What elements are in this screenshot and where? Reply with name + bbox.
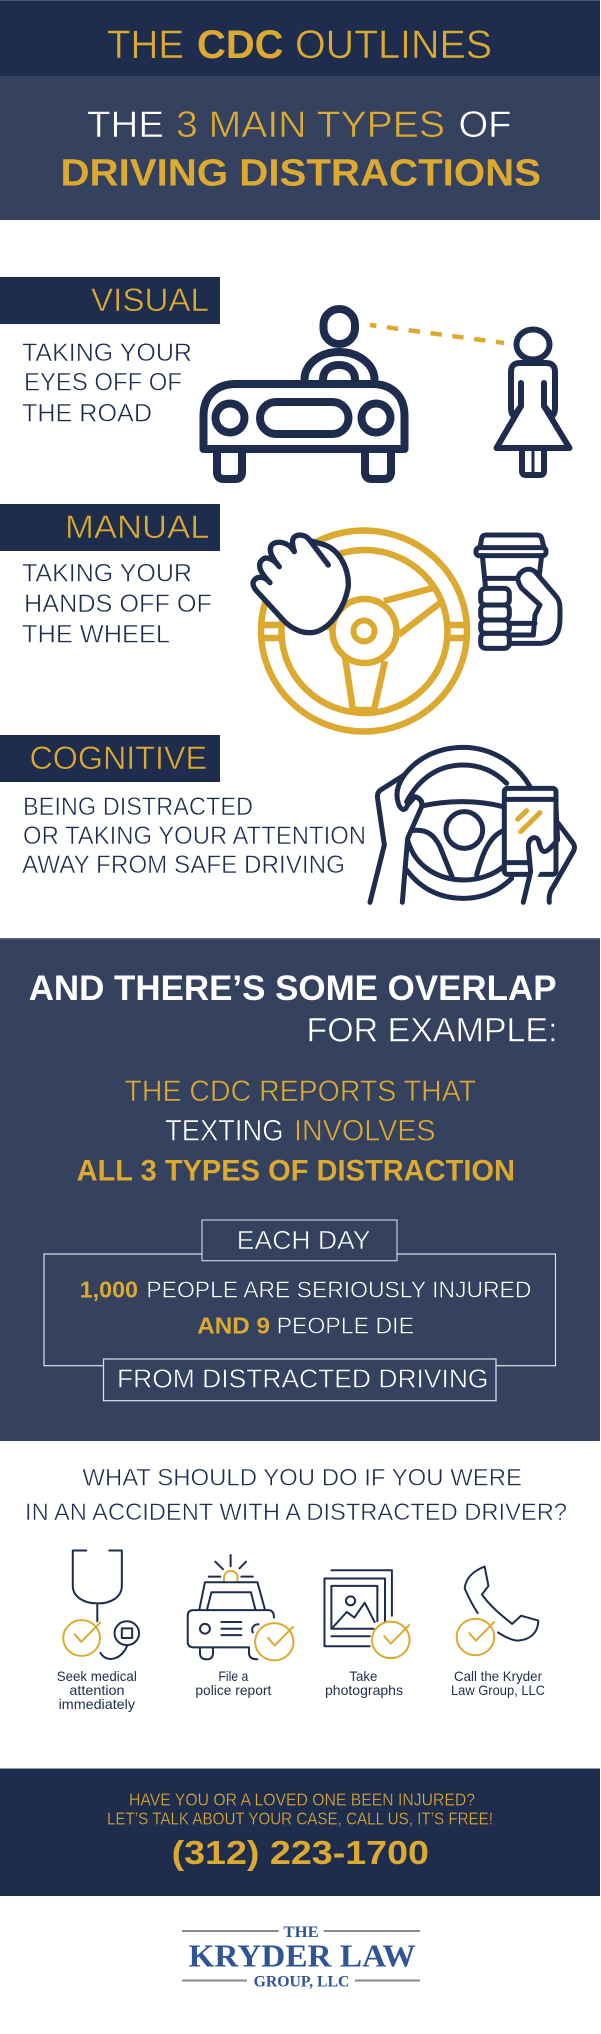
text: cognitive description: AWAY FROM SAFE DRIVING: [22, 852, 345, 879]
caption: Seek medical: [57, 1668, 137, 1684]
panel: header: [0, 0, 600, 220]
icon: driver in car: [204, 309, 404, 479]
caption: police report: [195, 1682, 271, 1698]
caption: [451, 1668, 545, 1698]
heading: the CDC outlines: THE: [107, 23, 184, 67]
stat: injuries and deaths: AND 9: [197, 1313, 270, 1339]
caption: immediately: [59, 1696, 135, 1712]
text: CDC report: [77, 1075, 515, 1188]
caption: attention: [69, 1682, 124, 1698]
heading: driving distractions: DRIVING DISTRACTIONS: [60, 153, 541, 195]
stat: injuries and deaths: PEOPLE ARE SERIOUSLY INJURED: [146, 1277, 531, 1303]
text: visual description: THE ROAD: [22, 401, 152, 428]
caption: Law Group, LLC: [451, 1682, 545, 1698]
stat: injuries and deaths: PEOPLE DIE: [277, 1313, 414, 1339]
caption: photographs: [325, 1682, 403, 1698]
logo: The Kryder Law Group: THE: [284, 1924, 319, 1941]
icon: stethoscope: [63, 1551, 139, 1659]
caption: [57, 1668, 137, 1712]
label: cognitive: [0, 735, 220, 782]
text: manual description: [22, 561, 212, 649]
logo: The Kryder Law Group: GROUP, LLC: [254, 1974, 349, 1991]
caption: Call the Kryder: [454, 1668, 542, 1684]
box: statistics: [44, 1220, 556, 1401]
icon: police car: [188, 1555, 293, 1660]
caption: [195, 1668, 271, 1698]
heading: the 3 main types of: 3 MAIN TYPES: [176, 104, 445, 145]
logo: The Kryder Law Group: KRYDER LAW: [188, 1938, 416, 1974]
callout: each day: [202, 1220, 397, 1261]
step: take photographs: [324, 1570, 410, 1698]
icon: hand holding coffee cup: [476, 535, 560, 648]
logo: The Kryder Law Group: [182, 1924, 420, 1991]
stat: injuries and deaths: 1,000: [80, 1277, 138, 1303]
text: cognitive description: [22, 794, 366, 879]
step: call the firm: [451, 1567, 545, 1698]
label: manual: MANUAL: [65, 509, 210, 545]
caption: File a: [218, 1668, 248, 1684]
text: visual description: [22, 340, 192, 428]
heading: what should you do: WHAT SHOULD YOU DO IF YOU WERE: [82, 1464, 522, 1491]
arrow: line of sight: [370, 325, 504, 343]
text: visual description: EYES OFF OF: [24, 370, 182, 397]
icon: steering wheel: [260, 530, 469, 732]
caption: [325, 1668, 403, 1698]
text: CDC report: INVOLVES: [294, 1115, 436, 1148]
text: visual description: TAKING YOUR: [22, 340, 192, 367]
panel: visual: [0, 277, 570, 479]
text: call to action: [107, 1790, 493, 1828]
text: CDC report: ALL 3 TYPES OF DISTRACTION: [77, 1155, 515, 1188]
heading: the 3 main types of: [87, 104, 512, 145]
icon: photographs: [324, 1570, 410, 1658]
label: visual: VISUAL: [91, 282, 209, 318]
text: manual description: HANDS OFF OF: [24, 591, 212, 618]
text: manual description: THE WHEEL: [22, 622, 170, 649]
caption: Take: [349, 1668, 378, 1684]
text: cognitive description: OR TAKING YOUR ATTENTION: [23, 823, 366, 850]
stat: injuries and deaths: [80, 1277, 531, 1339]
text: call to action: LET’S TALK ABOUT YOUR CASE, CALL US, IT’S FREE!: [107, 1808, 493, 1828]
heading: the 3 main types of: THE: [87, 104, 164, 145]
heading: what should you do: IN AN ACCIDENT WITH A DISTRACTED DRIVER?: [25, 1499, 567, 1526]
heading: what should you do: [25, 1464, 567, 1526]
label: visual: [0, 277, 220, 324]
icon: pedestrian woman: [496, 330, 570, 475]
callout: from distracted driving: FROM DISTRACTED DRIVING: [117, 1364, 488, 1394]
panel: manual: [0, 504, 560, 732]
heading: some overlap: AND THERE’S SOME OVERLAP: [29, 969, 556, 1008]
panel: cognitive: [0, 735, 574, 902]
heading: the CDC outlines: OUTLINES: [295, 23, 492, 67]
callout: each day: EACH DAY: [237, 1225, 370, 1255]
text: call to action: HAVE YOU OR A LOVED ONE BEEN INJURED?: [129, 1790, 475, 1810]
text: cognitive description: BEING DISTRACTED: [23, 794, 253, 821]
label: manual: [0, 504, 220, 551]
heading: the CDC outlines: [107, 23, 492, 67]
icon: hand on wheel: [253, 535, 348, 633]
text: manual description: TAKING YOUR: [22, 561, 192, 588]
step: seek medical attention: [57, 1551, 139, 1712]
text: CDC report: TEXTING: [165, 1115, 284, 1148]
icon: hands on wheel with phone: [370, 747, 574, 902]
text: phone number: (312) 223-1700: [172, 1835, 429, 1872]
heading: the CDC outlines: CDC: [197, 23, 284, 67]
heading: the 3 main types of: OF: [458, 104, 512, 145]
panel: overlap: [0, 938, 600, 1441]
label: cognitive: COGNITIVE: [30, 740, 207, 776]
callout: from distracted driving: [104, 1359, 496, 1401]
step: file police report: [188, 1555, 293, 1698]
text: for example: FOR EXAMPLE:: [306, 1012, 558, 1050]
panel: call to action: [0, 1768, 600, 1896]
icon: telephone: [457, 1567, 538, 1655]
text: CDC report: THE CDC REPORTS THAT: [124, 1075, 476, 1108]
